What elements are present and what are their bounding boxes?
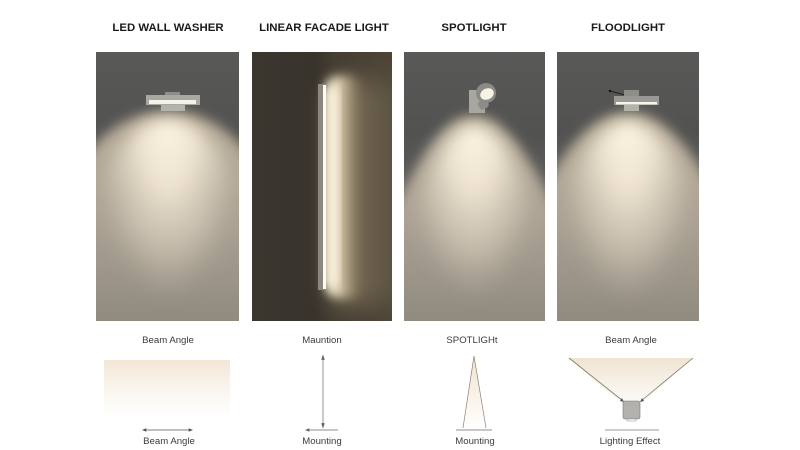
panel: spotlight photo — [404, 52, 545, 321]
diagram: wall washer light swatch — [104, 360, 230, 431]
label: beam angle, panel 4: Beam Angle — [605, 335, 657, 346]
heading: spotlight: SPOTLIGHT — [441, 22, 507, 34]
panel: LED wall washer photo — [96, 52, 239, 321]
icon: floodlight lamp — [623, 401, 640, 421]
label: mauntion: Mauntion — [302, 335, 342, 346]
heading: linear facade light: LINEAR FACADE LIGHT — [259, 22, 389, 34]
icon: floodlight fixture — [609, 90, 659, 111]
arrow: beam angle width — [143, 429, 192, 431]
label: mounting, diagram 3: Mounting — [455, 436, 495, 447]
heading: LED wall washer: LED WALL WASHER — [112, 22, 224, 34]
diagram: floodlight wide beam — [569, 358, 693, 430]
label: lighting effect: Lighting Effect — [600, 436, 661, 447]
heading: floodlight: FLOODLIGHT — [591, 22, 665, 34]
icon: linear light bar — [318, 84, 326, 290]
icon: wall washer fixture — [146, 92, 200, 111]
panel: linear facade light photo — [252, 52, 405, 321]
label: beam angle, diagram 1: Beam Angle — [143, 436, 195, 447]
panel: floodlight photo — [557, 52, 699, 321]
label: mounting, diagram 2: Mounting — [302, 436, 342, 447]
label: SPOTLIGHt: SPOTLIGHt — [446, 335, 498, 346]
diagram: spotlight narrow beam — [456, 356, 492, 430]
icon: spotlight fixture — [469, 83, 496, 113]
label: beam angle, panel 1: Beam Angle — [142, 335, 194, 346]
diagram: linear light mounting arrow — [306, 356, 338, 431]
